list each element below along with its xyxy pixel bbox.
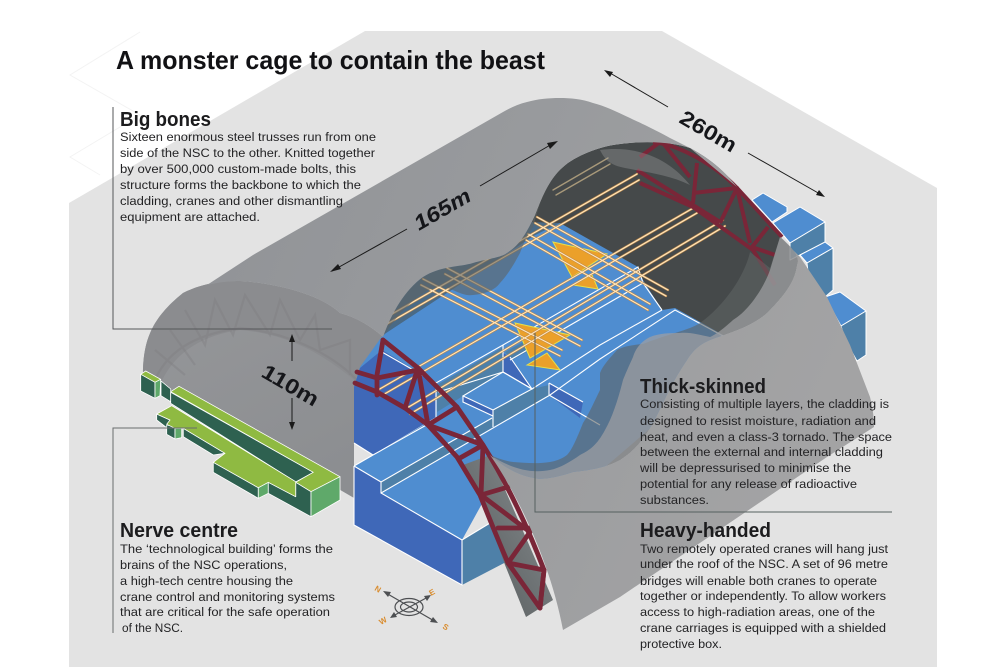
text block: Heavy-handed: protective box. xyxy=(640,637,722,651)
text block: Nerve centre xyxy=(120,520,335,635)
text block: Big bones: Sixteen enormous steel trusses run from one xyxy=(120,130,376,144)
text block: Big bones: equipment are attached. xyxy=(120,210,260,224)
compass: E xyxy=(428,587,437,598)
back truss xyxy=(637,142,782,285)
dark strip under front truss xyxy=(463,455,553,617)
mid cladding layer xyxy=(490,237,798,479)
blue floor xyxy=(354,223,725,540)
text block: Nerve centre: a high-tech centre housing the xyxy=(120,574,293,588)
dimension: 260m xyxy=(604,70,825,197)
white edges xyxy=(354,267,725,585)
text block: Thick-skinned: substances. xyxy=(640,493,709,507)
text block: Thick-skinned: between the external and internal cladding xyxy=(640,445,883,459)
text block: Thick-skinned: potential for any release of radioactive xyxy=(640,477,857,491)
front truss xyxy=(355,340,544,608)
compass: S xyxy=(441,622,451,633)
compass: W xyxy=(378,615,389,627)
text block: Big bones: Big bones xyxy=(120,109,211,131)
interior of the shelter xyxy=(354,142,798,585)
box xyxy=(463,372,532,410)
orange crane carriages xyxy=(515,242,607,370)
dark back wall xyxy=(383,142,798,479)
text block: Big bones xyxy=(120,109,376,224)
leader line: Heavy-handed xyxy=(535,333,892,512)
back arch of the shelter xyxy=(143,281,383,498)
text block: Heavy-handed: bridges will enable both cranes to operate xyxy=(640,574,877,588)
text block: Thick-skinned xyxy=(639,376,892,507)
text block: Nerve centre: The ‘technological building’ forms the xyxy=(120,542,333,556)
text block: Big bones: by over 500,000 custom-made bolts, this xyxy=(120,162,356,176)
floor under cladding band xyxy=(383,222,560,335)
compass: N xyxy=(373,584,383,595)
dimension: 165m: 165m xyxy=(410,184,475,235)
text block: Nerve centre: Nerve centre xyxy=(120,520,238,542)
text block: Nerve centre: crane control and monitoring systems xyxy=(120,590,335,604)
floor strip xyxy=(381,418,493,493)
leader line: Nerve centre xyxy=(113,428,197,633)
dimension: 260m: 260m xyxy=(676,106,741,157)
translucent wedge at crown xyxy=(600,149,690,185)
front block wall xyxy=(354,466,462,585)
leader line: Big bones xyxy=(113,107,332,329)
text block: Heavy-handed: Heavy-handed xyxy=(640,520,771,542)
text block: Thick-skinned: designed to resist moisture, radiation and xyxy=(640,414,876,428)
dimension: 165m xyxy=(330,141,558,272)
text block: Heavy-handed: Two remotely operated cranes will hang just xyxy=(640,542,889,556)
text block: Thick-skinned: heat, and even a class-3 tornado. The space xyxy=(640,430,892,444)
front block side xyxy=(462,520,510,585)
text block: Big bones: cladding, cranes and other dismantling xyxy=(120,194,343,208)
dark blue wall xyxy=(354,350,436,455)
text block: Big bones: structure forms the backbone to which the xyxy=(120,178,361,192)
icon: technological building (green) xyxy=(141,371,340,517)
text block: Heavy-handed: together or independently. To allow workers xyxy=(640,589,886,603)
text block: Nerve centre: that are critical for the safe operation xyxy=(120,605,330,619)
crane bridges (rails) xyxy=(378,158,725,414)
text block: Nerve centre: brains of the NSC operations, xyxy=(120,558,287,572)
text block: Heavy-handed: access to high-radiation areas, one of the xyxy=(640,605,875,619)
dimension: 110m: 110m xyxy=(258,360,323,411)
right side blocks xyxy=(752,193,866,361)
dimension: 110m xyxy=(258,334,323,430)
title: A monster cage to contain the beast xyxy=(116,45,545,75)
text block: Big bones: side of the NSC to the other. Knitted together xyxy=(120,146,375,160)
text block: Heavy-handed: under the roof of the NSC. A set of 96 metre xyxy=(640,557,888,571)
text block: Nerve centre: of the NSC. xyxy=(122,621,183,635)
text block: Thick-skinned: Consisting of multiple layers, the cladding is xyxy=(640,397,889,411)
inner cladding layer xyxy=(383,142,798,479)
text block: Thick-skinned: will be depressurised to minimise the xyxy=(639,461,851,475)
text block: Thick-skinned: Thick-skinned xyxy=(640,376,766,398)
text block: Heavy-handed: crane carriages is equipped with a shielded xyxy=(640,621,886,635)
outer cladding shell xyxy=(207,98,874,630)
compass xyxy=(373,584,451,633)
text block: Heavy-handed xyxy=(640,520,889,651)
